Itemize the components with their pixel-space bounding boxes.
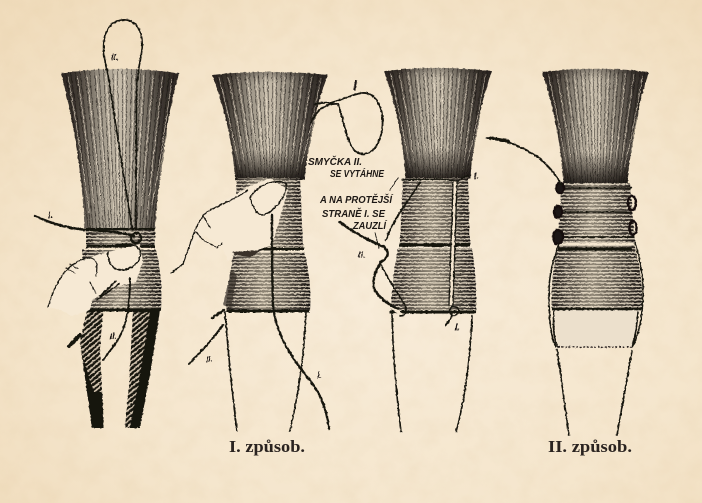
- string II tail: [189, 325, 223, 364]
- line 1: SMYČKA II.: [308, 155, 362, 168]
- figure: brush 1 with loop and hand: [35, 20, 179, 428]
- knots on right side: [628, 196, 636, 235]
- right flap: [632, 243, 643, 347]
- lower wrapping: [552, 245, 642, 310]
- lower wrapping: [226, 252, 310, 311]
- dark band: [399, 243, 470, 247]
- vertical string: [449, 182, 457, 305]
- callout text: [308, 155, 394, 232]
- label II: II.: [358, 250, 366, 260]
- caption: II. způsob: II. způsob.: [548, 437, 632, 456]
- knot tail: [446, 316, 452, 325]
- handle shading: [78, 310, 160, 428]
- left flap: [549, 245, 558, 347]
- label I: I.: [48, 210, 53, 220]
- caption: I. způsob: I. způsob.: [229, 437, 305, 456]
- line 4: STRANĚ I. SE: [322, 207, 386, 220]
- dotted line: [558, 346, 632, 348]
- bristles: [61, 69, 179, 228]
- string around top: [402, 175, 468, 181]
- figure: brush 4: [487, 69, 649, 435]
- label I top: I: [353, 77, 358, 93]
- label I top: I.: [474, 171, 479, 181]
- loop string II: [104, 20, 142, 228]
- string I: [272, 215, 329, 429]
- upper wrapping: [558, 183, 635, 243]
- hand: [48, 244, 143, 316]
- lower wrapping: [390, 248, 476, 314]
- bristles: [384, 68, 492, 179]
- line 2: SE VYTÁHNE: [330, 167, 385, 180]
- top string: [487, 138, 561, 184]
- diagonal string: [386, 182, 420, 240]
- short tail: [212, 310, 224, 318]
- line 5: ZAUZLÍ: [352, 219, 388, 232]
- string II lower: [103, 278, 130, 360]
- flap interior: [553, 310, 640, 347]
- label II lower: II.: [110, 332, 117, 341]
- upper wrapping: [233, 178, 303, 247]
- knot loop: [450, 306, 458, 316]
- knot: [131, 233, 141, 243]
- bristles: [212, 72, 328, 180]
- string II zigzag: [340, 222, 406, 318]
- string loop I: [311, 93, 383, 154]
- string tip: [490, 138, 508, 141]
- label I bottom: I.: [455, 322, 460, 332]
- bristles: [542, 69, 649, 184]
- label II top: II.: [111, 52, 119, 62]
- knots on left side: [553, 183, 564, 244]
- label II lower: II.: [206, 355, 213, 364]
- lower wrapping: [82, 250, 161, 310]
- figure: brush 2 with hand: [170, 72, 383, 431]
- binding band: [86, 228, 155, 248]
- upper wrapping: [400, 178, 470, 244]
- dark band: [232, 248, 304, 250]
- pointer lines: [375, 178, 398, 248]
- label I lower: I.: [317, 370, 322, 380]
- tail: [69, 335, 80, 346]
- dark band: [558, 248, 632, 250]
- line 3: A NA PROTĚJŠÍ: [319, 193, 394, 206]
- handle lines: [225, 312, 306, 431]
- string I: [35, 216, 134, 236]
- figure: brush 3 with knot: [340, 68, 492, 432]
- handle lines: [392, 314, 472, 432]
- hand: [170, 178, 288, 308]
- handle lines: [557, 349, 632, 435]
